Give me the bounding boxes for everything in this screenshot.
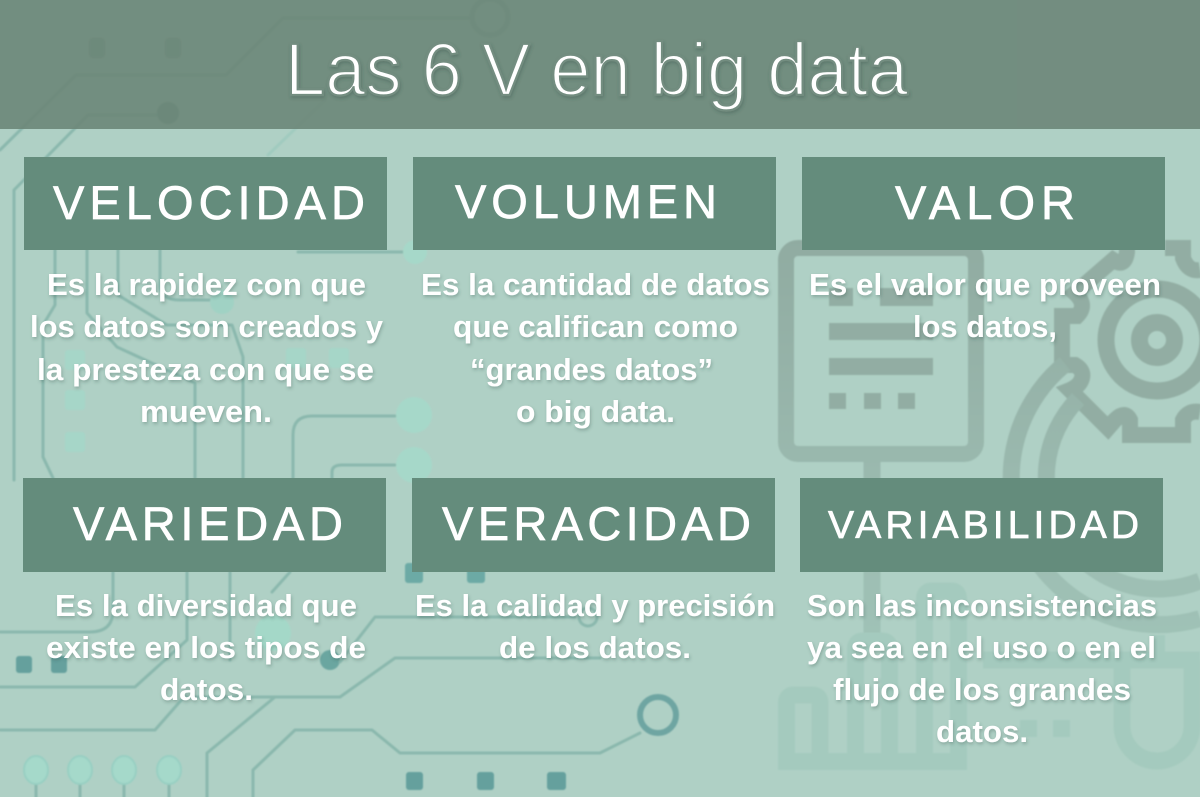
small squares — [1020, 635, 1165, 737]
circuit board pattern — [0, 0, 676, 797]
description — [809, 267, 1161, 344]
description: o big data. — [516, 394, 675, 429]
heading: VARIABILIDAD — [828, 504, 1139, 547]
description: “grandes datos” — [470, 352, 713, 387]
description: los datos, — [913, 309, 1057, 344]
panel: valor — [802, 157, 1165, 344]
description: Es el valor que proveen — [809, 267, 1161, 302]
header band — [0, 0, 1200, 129]
description: de los datos. — [499, 630, 691, 665]
description: los datos son creados y — [30, 309, 384, 344]
description: Son las inconsistencias — [807, 588, 1157, 623]
panel: variabilidad — [800, 478, 1163, 749]
heading box — [23, 478, 386, 572]
description: mueven. — [140, 394, 272, 429]
description: existe en los tipos de — [46, 630, 366, 665]
description: flujo de los grandes — [833, 672, 1131, 707]
heading box — [802, 157, 1165, 250]
heading: VOLUMEN — [455, 175, 717, 228]
description — [30, 267, 384, 429]
heading: VELOCIDAD — [53, 176, 365, 229]
description: la presteza con que se — [37, 352, 374, 387]
icon: magnifier arcs — [1011, 364, 1200, 625]
description: Es la rapidez con que — [47, 267, 366, 302]
description: ya sea en el uso o en el — [807, 630, 1156, 665]
description — [46, 588, 366, 707]
panel: veracidad — [412, 478, 775, 665]
icon: bar chart — [778, 591, 1200, 762]
heading box — [413, 157, 776, 250]
panel: velocidad — [24, 157, 387, 429]
description: datos. — [160, 672, 253, 707]
description: Es la cantidad de datos — [421, 267, 770, 302]
icon: gear — [1062, 240, 1200, 435]
icon: document — [786, 248, 976, 640]
panel: volumen — [413, 157, 776, 429]
description — [421, 267, 770, 429]
heading box — [412, 478, 775, 572]
description — [415, 588, 775, 665]
description: datos. — [936, 714, 1028, 749]
panel: variedad — [23, 478, 386, 707]
heading box — [800, 478, 1163, 572]
description: Es la calidad y precisión — [415, 588, 775, 623]
document lines — [829, 288, 933, 409]
title: Las 6 V en big data — [285, 28, 909, 111]
description: Es la diversidad que — [55, 588, 357, 623]
description: que califican como — [453, 309, 738, 344]
heading: VALOR — [895, 176, 1075, 229]
heading: VERACIDAD — [442, 497, 751, 550]
icon: document, gear and magnifier watermark — [778, 240, 1200, 762]
heading box — [24, 157, 387, 250]
heading: VARIEDAD — [73, 497, 343, 550]
description — [807, 588, 1157, 749]
